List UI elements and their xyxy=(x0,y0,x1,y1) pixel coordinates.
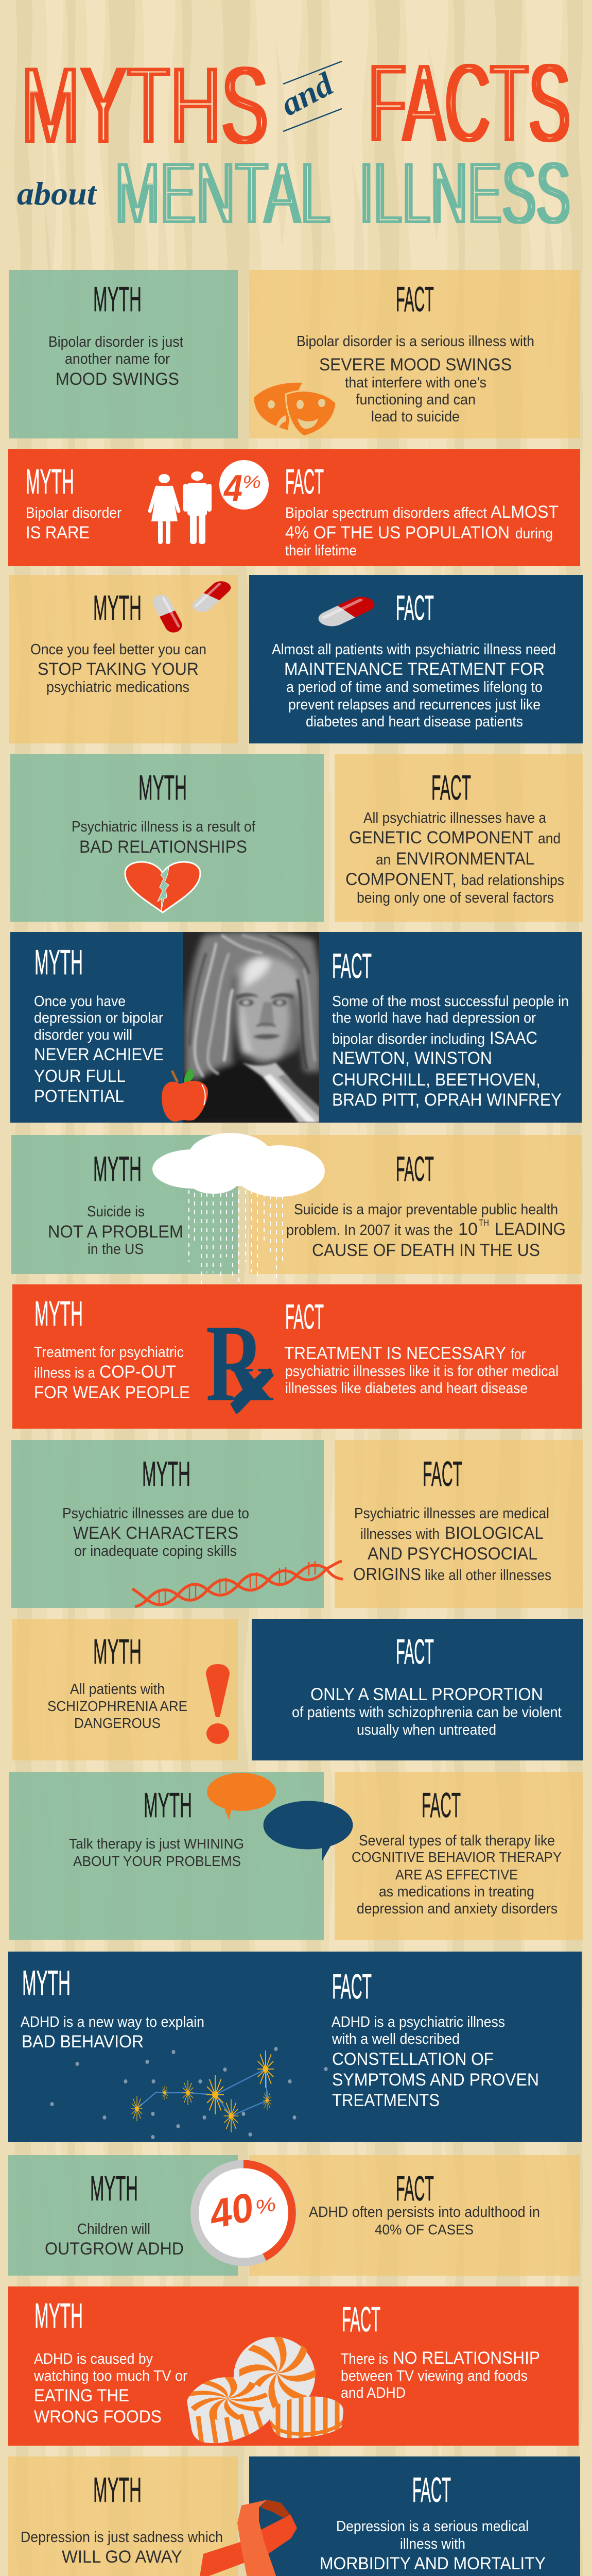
panel: myth stop medications xyxy=(9,575,238,743)
text block xyxy=(292,1685,562,1738)
panel: myth sadness: MYTH xyxy=(93,2470,142,2510)
panel: myth bipolar mood swings xyxy=(9,270,238,438)
text block xyxy=(286,1201,566,1260)
text block: WILL GO AWAY xyxy=(62,2547,182,2567)
text block: myth: illness is a xyxy=(34,1365,96,1381)
candy lower left xyxy=(187,2376,272,2445)
text block: illnesses with xyxy=(360,1526,440,1543)
text block xyxy=(320,2518,546,2573)
text block: ABOUT YOUR PROBLEMS xyxy=(73,1853,241,1869)
text block: prevent relapses and recurrences just like xyxy=(288,697,541,713)
text block: MORBIDITY AND MORTALITY xyxy=(320,2554,546,2573)
icon: exclamation mark xyxy=(206,1664,230,1744)
panel: fact genetic component xyxy=(335,754,583,922)
panel: myth suicide: MYTH xyxy=(93,1149,142,1189)
text block: Depression is a serious medical xyxy=(336,2518,529,2535)
text block xyxy=(30,641,206,696)
text block: Several types of talk therapy like xyxy=(359,1833,555,1849)
icon: peppermint candies xyxy=(187,2337,343,2445)
text block: Suicide is a major preventable public health xyxy=(294,1201,558,1218)
text block: being only one of several factors xyxy=(357,890,554,906)
panel: fact schizophrenia: FACT xyxy=(396,1632,434,1671)
panel: myth bad relationships: MYTH xyxy=(138,768,187,807)
text block: lead to suicide xyxy=(371,409,460,425)
text block: that interfere with one's xyxy=(345,375,486,391)
text block: fact: ADHD is a psychiatric illness xyxy=(332,2014,505,2030)
text block: myth: EATING THE xyxy=(34,2386,129,2405)
chart: forty percent donut xyxy=(190,2160,297,2266)
text block: fact: psychiatric illnesses like it is for other medical xyxy=(285,1363,559,1380)
text block: fact xyxy=(341,2348,540,2401)
text block: and xyxy=(538,831,561,847)
text block: fact: the world have had depression or xyxy=(332,1010,536,1026)
text block: Bipolar disorder is just xyxy=(48,334,183,350)
text block: fact: during xyxy=(515,526,553,542)
text block: OUTGROW ADHD xyxy=(45,2239,184,2259)
panel: never achieve potential: MYTH xyxy=(34,943,83,982)
text block: fact: Bipolar spectrum disorders affect xyxy=(285,505,487,521)
panel: fact genetic component: FACT xyxy=(431,768,471,807)
text block: depression and anxiety disorders xyxy=(357,1901,558,1917)
text block: an xyxy=(376,852,391,868)
text block: STOP TAKING YOUR xyxy=(38,659,199,679)
panel: bipolar is rare: MYTH xyxy=(26,462,74,501)
icon: woman and man xyxy=(150,471,212,544)
hair and robe mass xyxy=(183,931,320,1123)
text block xyxy=(69,1836,244,1869)
text block: myth: BAD BEHAVIOR xyxy=(22,2032,144,2052)
candy lower right xyxy=(270,2396,343,2439)
image: portrait of Isaac Newton xyxy=(183,931,320,1123)
text block xyxy=(297,333,534,425)
panel: fact schizophrenia xyxy=(252,1619,583,1760)
panel: myth sadness xyxy=(8,2456,238,2576)
title word: myths: MYTHS xyxy=(21,44,268,167)
text block: fact: There is xyxy=(341,2351,388,2367)
text block: ARE AS EFFECTIVE xyxy=(395,1867,518,1883)
text block: SEVERE MOOD SWINGS xyxy=(319,355,512,375)
text block: functioning and can xyxy=(356,392,476,408)
text block: fact: between TV viewing and foods xyxy=(341,2368,528,2384)
text block: ADHD often persists into adulthood in xyxy=(309,2204,540,2221)
text block: Talk therapy is just WHINING xyxy=(69,1836,244,1852)
text block: fact: CHURCHILL, BEETHOVEN, xyxy=(332,1070,541,1090)
text block: AND PSYCHOSOCIAL xyxy=(368,1544,537,1564)
text block: myth: ADHD is a new way to explain xyxy=(21,2014,204,2030)
text block: NOT A PROBLEM xyxy=(48,1222,183,1242)
text block xyxy=(345,810,564,906)
text block: Children will xyxy=(77,2221,150,2238)
text block: myth: Treatment for psychiatric xyxy=(34,1344,184,1361)
text block: DANGEROUS xyxy=(74,1715,161,1731)
panel: fact suicide: FACT xyxy=(396,1149,434,1189)
text block: a period of time and sometimes lifelong to xyxy=(286,679,543,696)
panel: myth talk therapy: MYTH xyxy=(144,1786,192,1825)
icon: speech bubbles xyxy=(207,1773,353,1861)
panel: bipolar is rare xyxy=(8,449,580,566)
text block: ENVIRONMENTAL xyxy=(396,849,534,869)
panel: fact biological origins: FACT xyxy=(423,1454,462,1494)
panel: adhd bad behavior: FACT xyxy=(332,1967,372,2006)
panel: myth schizophrenia: MYTH xyxy=(93,1632,142,1671)
text block: Suicide is xyxy=(87,1204,145,1220)
panel: fact talk therapy: FACT xyxy=(422,1786,461,1825)
text block: fact: bipolar disorder including xyxy=(332,1031,485,1047)
panel: fact adhd persists xyxy=(249,2155,580,2276)
hair strands xyxy=(189,935,315,1077)
text block: fact: CONSTELLATION OF xyxy=(332,2049,494,2069)
text block xyxy=(62,1505,249,1560)
text block: myth: YOUR FULL xyxy=(34,1066,126,1086)
panel: myth schizophrenia xyxy=(12,1619,238,1760)
text block: ORIGINS xyxy=(353,1565,421,1584)
text block: TH xyxy=(479,1218,489,1228)
text block xyxy=(21,2529,223,2567)
panel: fact morbidity xyxy=(249,2456,580,2576)
panel: adhd bad behavior: MYTH xyxy=(22,1963,71,2003)
panel: cop-out treatment xyxy=(12,1284,582,1429)
text block xyxy=(272,641,556,730)
text block: MAINTENANCE TREATMENT FOR xyxy=(284,659,545,679)
text block: myth: POTENTIAL xyxy=(34,1087,124,1106)
text block: fact: ALMOST xyxy=(491,502,559,522)
text block: Almost all patients with psychiatric illness need xyxy=(272,641,556,658)
panel: fact severe mood swings: FACT xyxy=(396,280,434,319)
text block: fact: BRAD PITT, OPRAH WINFREY xyxy=(332,1090,562,1110)
panel: myth bad relationships xyxy=(10,754,324,922)
text block: GENETIC COMPONENT xyxy=(349,828,533,848)
text block: as medications in treating xyxy=(379,1884,534,1900)
icon: awareness ribbon xyxy=(199,2500,297,2576)
text block: fact xyxy=(332,2014,539,2110)
text block xyxy=(48,334,183,389)
text block xyxy=(352,1833,562,1917)
panel: adhd wrong foods: MYTH xyxy=(34,2296,83,2335)
icon: four percent badge: 4 xyxy=(223,468,242,509)
text block: COMPONENT, xyxy=(345,870,457,889)
text block: fact: and ADHD xyxy=(341,2385,406,2401)
icon: four percent badge xyxy=(219,460,269,510)
text block: SCHIZOPHRENIA ARE xyxy=(47,1698,187,1714)
text block: fact: TREATMENT IS NECESSARY xyxy=(284,1344,506,1363)
title xyxy=(17,41,570,242)
text block: fact: their lifetime xyxy=(285,543,357,559)
text block: fact: SYMPTOMS AND PROVEN xyxy=(332,2070,539,2090)
text block: fact: illnesses like diabetes and heart disease xyxy=(285,1380,528,1397)
panel: fact talk therapy xyxy=(335,1772,583,1940)
text block: problem. In 2007 it was the xyxy=(286,1222,453,1239)
text block: usually when untreated xyxy=(357,1722,496,1738)
chart: forty percent donut: % xyxy=(253,2193,278,2219)
text block: myth xyxy=(33,2351,187,2427)
candy upper xyxy=(234,2337,316,2415)
icon: four percent badge: % xyxy=(242,472,261,492)
icon: prescription symbol: x xyxy=(230,1339,274,1415)
text block: fact: with a well described xyxy=(332,2031,460,2047)
panel: myth talk therapy xyxy=(9,1772,324,1940)
text block: fact: TREATMENTS xyxy=(332,2091,440,2110)
panel: myth outgrow adhd: MYTH xyxy=(90,2169,138,2208)
text block: myth: IS RARE xyxy=(26,523,90,543)
text block: MOOD SWINGS xyxy=(56,369,179,389)
panel: fact morbidity: FACT xyxy=(412,2470,451,2510)
text block: CAUSE OF DEATH IN THE US xyxy=(312,1241,540,1260)
text block xyxy=(47,1681,187,1731)
text block: Once you feel better you can xyxy=(30,641,206,658)
text block: WEAK CHARACTERS xyxy=(73,1523,238,1543)
text block: fact: for xyxy=(511,1346,526,1363)
text block: fact xyxy=(332,993,569,1110)
panel: adhd wrong foods xyxy=(8,2286,579,2446)
panel: fact maintenance treatment: FACT xyxy=(396,588,434,628)
panel: myth outgrow adhd xyxy=(8,2155,238,2276)
icon: pill xyxy=(313,594,380,630)
text block: myth: COP-OUT xyxy=(99,1362,176,1382)
text block xyxy=(72,819,256,857)
panel: never achieve potential xyxy=(10,931,582,1123)
text block: of patients with schizophrenia can be violent xyxy=(292,1704,562,1721)
text block: myth: depression or bipolar xyxy=(34,1010,163,1026)
text block: myth: NEVER ACHIEVE xyxy=(34,1045,164,1064)
panel: fact severe mood swings xyxy=(249,270,580,438)
panel: adhd wrong foods: FACT xyxy=(342,2300,380,2339)
icon: theatre masks xyxy=(254,383,336,436)
text block: myth: Once you have xyxy=(34,993,126,1010)
text block: myth: watching too much TV or xyxy=(33,2368,187,2384)
panel: myth stop medications: MYTH xyxy=(93,588,142,628)
text block xyxy=(45,2221,184,2259)
text block: or inadequate coping skills xyxy=(74,1543,237,1560)
text block: fact: 4% OF THE US POPULATION xyxy=(285,523,510,543)
text block: myth xyxy=(26,505,121,543)
panel: adhd bad behavior xyxy=(8,1952,582,2142)
text block: BAD RELATIONSHIPS xyxy=(79,837,247,857)
panel: myth bipolar mood swings: MYTH xyxy=(93,280,142,319)
text block: myth xyxy=(34,993,164,1106)
icon: prescription symbol: R xyxy=(206,1301,265,1425)
icon: dna strand xyxy=(132,1561,343,1606)
text block: myth: WRONG FOODS xyxy=(34,2407,162,2427)
text block: Psychiatric illnesses are medical xyxy=(354,1505,549,1522)
text block: fact xyxy=(284,1344,559,1397)
icon: broken heart xyxy=(125,862,200,912)
text block: myth xyxy=(21,2014,204,2052)
text block: 40% OF CASES xyxy=(375,2222,474,2238)
text block: fact xyxy=(285,502,559,559)
icon: constellation xyxy=(50,2047,327,2139)
text block: Psychiatric illness is a result of xyxy=(72,819,256,835)
panel: fact biological origins xyxy=(335,1440,583,1608)
text block: Psychiatric illnesses are due to xyxy=(62,1505,249,1522)
text block: in the US xyxy=(88,1241,144,1258)
text block: COGNITIVE BEHAVIOR THERAPY xyxy=(352,1849,562,1865)
panel: cop-out treatment: FACT xyxy=(285,1297,324,1336)
text block: fact: NEWTON, WINSTON xyxy=(332,1048,492,1068)
panel: myth suicide xyxy=(11,1135,238,1274)
text block: LEADING xyxy=(495,1219,566,1239)
text block: BIOLOGICAL xyxy=(445,1523,544,1543)
text block: myth xyxy=(34,1344,190,1402)
panel: never achieve potential: FACT xyxy=(332,946,372,986)
text block: another name for xyxy=(65,351,170,367)
panel: myth weak characters xyxy=(11,1440,324,1608)
text block: 10 xyxy=(458,1219,478,1239)
text block: Depression is just sadness which xyxy=(21,2529,223,2546)
text block: like all other illnesses xyxy=(425,1567,551,1584)
text block: diabetes and heart disease patients xyxy=(306,714,523,730)
panel: bipolar is rare: FACT xyxy=(285,462,324,501)
text block xyxy=(309,2204,540,2238)
text block: Bipolar disorder is a serious illness with xyxy=(297,333,534,350)
panel: cop-out treatment: MYTH xyxy=(34,1294,83,1333)
panel: myth weak characters: MYTH xyxy=(142,1454,190,1494)
text block: fact: ISAAC xyxy=(490,1028,537,1048)
text block xyxy=(353,1505,551,1584)
text block: ONLY A SMALL PROPORTION xyxy=(310,1685,543,1704)
text block xyxy=(48,1204,183,1258)
panel: fact adhd persists: FACT xyxy=(396,2169,434,2208)
title word: about: about xyxy=(17,175,97,212)
chart: forty percent donut: 40 xyxy=(204,2184,257,2238)
text block: myth: Bipolar disorder xyxy=(26,505,121,521)
panel: fact maintenance treatment xyxy=(249,575,583,743)
face features xyxy=(236,993,320,1123)
text block: All patients with xyxy=(70,1681,165,1698)
text block: myth: FOR WEAK PEOPLE xyxy=(34,1383,190,1402)
text block: fact: Some of the most successful people in xyxy=(332,993,569,1010)
text block: myth: disorder you will xyxy=(34,1027,132,1043)
text block: psychiatric medications xyxy=(46,679,189,696)
text block: myth: ADHD is caused by xyxy=(34,2351,153,2367)
title word: and: and xyxy=(274,65,339,123)
panel: fact suicide xyxy=(249,1135,582,1274)
text block: illness with xyxy=(400,2536,465,2552)
icon: falling pills xyxy=(150,579,235,635)
icon: rain cloud xyxy=(152,1133,325,1284)
icon: rain xyxy=(189,1190,283,1284)
title word: mental: MENTAL xyxy=(115,144,330,242)
text block: fact: NO RELATIONSHIP xyxy=(393,2348,540,2368)
text block: bad relationships xyxy=(461,872,564,889)
icon: apple xyxy=(162,1068,208,1122)
text block: All psychiatric illnesses have a xyxy=(363,810,547,826)
